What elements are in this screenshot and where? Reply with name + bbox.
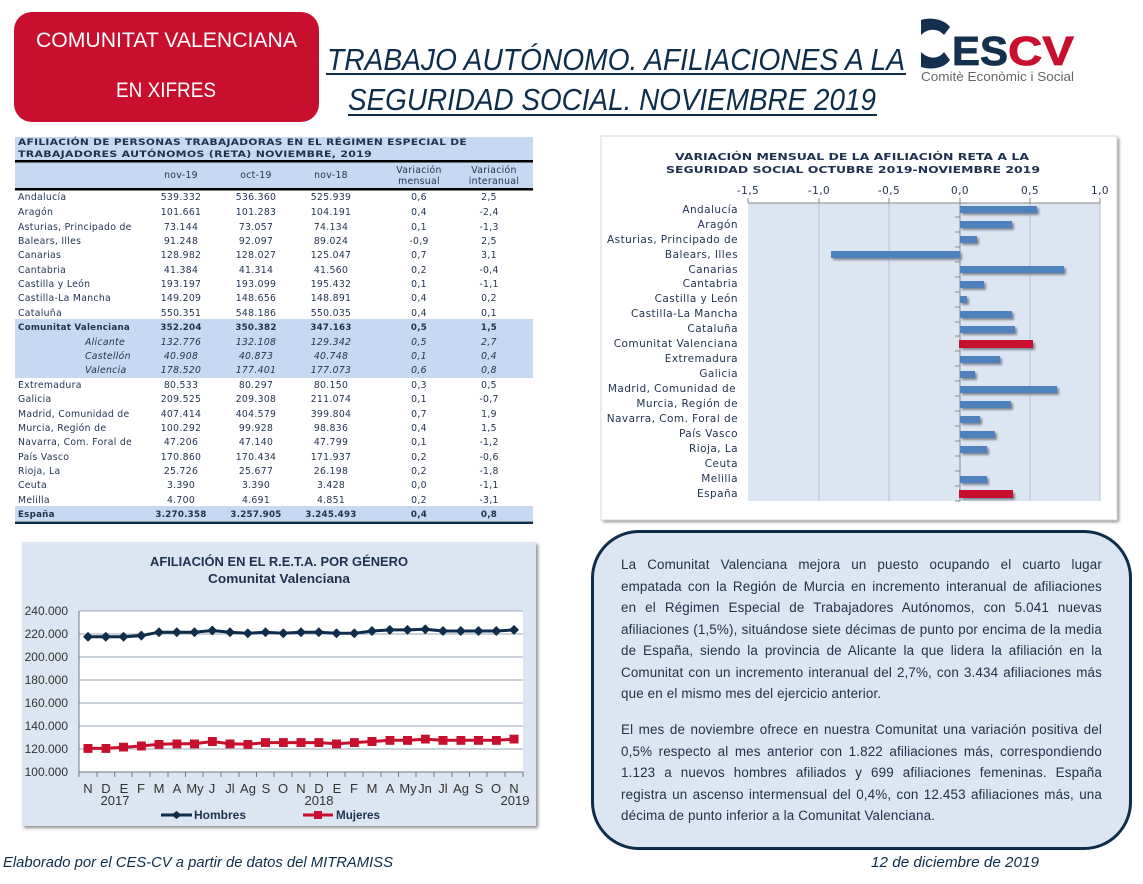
table rows: resto de comunidades: 0,4 [411, 423, 427, 434]
table rows: provincias: 132.776 [161, 337, 201, 348]
table rows: comunidades: 193.099 [236, 279, 276, 290]
text panel: commentary: Comunitat con un incremento interanual del 2,7%, con 3.434 afiliaciones más [621, 665, 1102, 680]
table rows: resto de comunidades: 80.150 [314, 380, 348, 391]
table rows: provincias: Alicante [84, 337, 125, 348]
table rows: comunidades: 0,2 [481, 293, 497, 304]
table rows: resto de comunidades: -3,1 [479, 495, 499, 506]
table rows: comunidades: Cataluña [18, 308, 62, 319]
text panel: commentary: registra un ascenso intermensual del 0,4%, con 12.453 afiliaciones más, una [621, 787, 1102, 802]
table: afiliaciones RETA por comunidad [15, 136, 533, 524]
table rows: comunidades: 536.360 [236, 192, 276, 203]
bar chart category labels: Balears, Illes [665, 249, 738, 261]
x axis labels: D [101, 781, 111, 796]
table title [18, 136, 467, 160]
table rows: comunidades: 128.982 [161, 250, 201, 261]
table rows: comunidades: 101.283 [236, 207, 276, 218]
table rows: resto de comunidades: Galicia [18, 394, 52, 405]
bars: regions [831, 206, 1064, 483]
table rows: comunidades: 539.332 [161, 192, 201, 203]
bar chart title: SEGURIDAD SOCIAL OCTUBRE 2019-NOVIEMBRE 2019 [666, 165, 1040, 176]
table rows: provincias: 177.401 [236, 365, 276, 376]
y axis labels: 160.000 [25, 696, 68, 710]
logo: CES CV: Comitè Econòmic i Social [921, 70, 1074, 84]
table rows: comunidades: 195.432 [311, 279, 351, 290]
table rows: resto de comunidades: 4.700 [167, 495, 195, 506]
table rows: comunidades: 548.186 [236, 308, 276, 319]
table rows: resto de comunidades: 170.434 [236, 452, 276, 463]
table rows: resto de comunidades: 0,7 [411, 409, 427, 420]
table rows: provincias: 0,8 [481, 365, 497, 376]
line: Hombres [88, 629, 514, 637]
bar chart category labels: Rioja, La [689, 443, 738, 455]
title [326, 42, 906, 117]
table rows: comunidades: 2,5 [481, 192, 497, 203]
table rows: comunidades: 128.027 [236, 250, 276, 261]
table rows: comunidades: 0,7 [411, 250, 427, 261]
x axis labels: 2017 [101, 793, 129, 808]
bar chart x axis labels: 0,5 [1021, 185, 1039, 197]
bar chart x axis labels: 1,0 [1091, 185, 1109, 197]
table rows: resto de comunidades: 99.928 [239, 423, 273, 434]
table rows: resto de comunidades: 170.860 [161, 452, 201, 463]
table rows: resto de comunidades [18, 380, 499, 506]
table rows: provincias: 0,1 [411, 351, 427, 362]
bar chart category labels: Canarias [688, 264, 738, 276]
table rows: resto de comunidades: -1,8 [479, 466, 499, 477]
table rows: comunidades: Aragón [18, 207, 53, 218]
table header: mensual [398, 176, 440, 187]
x axis labels: My [186, 781, 204, 796]
text panel: commentary: que en el mismo mes del ejercicio anterior. [621, 686, 881, 701]
bar chart category labels: Castilla y León [655, 293, 738, 305]
table rows: comunidades [18, 192, 499, 319]
text panel: commentary: El mes de noviembre ofrece en nuestra Comunitat una variación positiva del [621, 722, 1102, 737]
table rows: comunidades: 92.097 [239, 236, 273, 247]
table rows: comunidades: 3,1 [481, 250, 497, 261]
table rows: resto de comunidades: 404.579 [236, 409, 276, 420]
table rows: resto de comunidades: 1,5 [481, 423, 497, 434]
text panel: commentary: afiliaciones (1,5%), situándose siete décimas de punto por encima de la media [621, 622, 1102, 637]
x axis labels [83, 781, 529, 808]
table rows: provincias [84, 337, 497, 376]
table rows: comunidades: Asturias, Principado de [18, 222, 132, 233]
table row: España: España [18, 510, 55, 520]
footer: date: 12 de diciembre de 2019 [871, 854, 1040, 871]
table rows: resto de comunidades: 80.297 [239, 380, 273, 391]
text panel: commentary: décima de punto inferior a la Comunitat Valenciana. [621, 808, 935, 823]
bar chart category labels: Extremadura [665, 353, 738, 365]
table row: Comunitat Valenciana [18, 323, 497, 333]
table rows: comunidades: Castilla-La Mancha [18, 293, 111, 304]
text panel: commentary: en el Régimen Especial de Trabajadores Autónomos, con 5.041 nuevas [621, 600, 1102, 615]
table rows: resto de comunidades: 80.533 [164, 380, 198, 391]
table rows: resto de comunidades: 0,0 [411, 480, 427, 491]
table title: TRABAJADORES AUTÓNOMOS (RETA) NOVIEMBRE, 2019 [18, 148, 372, 160]
x axis labels: M [367, 781, 377, 796]
table rows: provincias: 178.520 [161, 365, 201, 376]
table rows: resto de comunidades: Navarra, Com. Foral de [18, 437, 132, 448]
footer: source: Elaborado por el CES-CV a partir de datos del MITRAMISS [3, 854, 393, 871]
table row: España [18, 510, 497, 520]
table rows: provincias: 0,6 [411, 365, 427, 376]
table rows: comunidades: -1,3 [479, 222, 499, 233]
table rows: resto de comunidades: 0,5 [481, 380, 497, 391]
x axis labels: Ag [240, 781, 256, 796]
table header: Variación [396, 165, 442, 176]
table rows: resto de comunidades: 0,2 [411, 466, 427, 477]
bar chart category labels [607, 204, 738, 500]
y axis labels [25, 604, 68, 779]
x axis labels: E [333, 781, 342, 796]
table rows: provincias: 177.073 [311, 365, 351, 376]
table rows: comunidades: Cantabria [18, 265, 66, 276]
logo: CES CV: ES [952, 28, 1008, 74]
table rows: comunidades: 2,5 [481, 236, 497, 247]
table rows: provincias: 40.873 [239, 351, 273, 362]
table rows: resto de comunidades: 0,2 [411, 495, 427, 506]
bar chart x axis labels: -1,0 [808, 185, 830, 197]
bar chart category labels: Andalucía [682, 204, 738, 216]
table rows: resto de comunidades: 0,3 [411, 380, 427, 391]
legend: Hombres: Hombres [194, 808, 246, 822]
x axis labels: 2018 [305, 793, 333, 808]
table row: Comunitat Valenciana: 347.163 [310, 323, 352, 333]
table rows: resto de comunidades: 47.799 [314, 437, 348, 448]
bar chart category labels: Galicia [699, 368, 738, 380]
table rows: resto de comunidades: 25.726 [164, 466, 198, 477]
x axis labels: Jn [418, 781, 432, 796]
table rows: resto de comunidades: Melilla [18, 495, 50, 506]
x axis labels: Ag [453, 781, 469, 796]
bar chart category labels: País Vasco [679, 428, 738, 440]
bar chart title [666, 150, 1040, 176]
table header: interanual [469, 176, 519, 187]
x axis labels: N [83, 781, 93, 796]
bar chart category labels: Cataluña [687, 323, 738, 335]
table rows: comunidades: 0,2 [411, 265, 427, 276]
table rows: comunidades: 148.656 [236, 293, 276, 304]
bar chart x axis labels: 0,0 [951, 185, 969, 197]
y axis labels: 140.000 [25, 719, 68, 733]
table rows: comunidades: 73.144 [164, 222, 198, 233]
table rows: comunidades: -0,4 [479, 265, 499, 276]
bar chart category labels: Comunitat Valenciana [614, 338, 738, 350]
x axis labels: My [399, 781, 417, 796]
table rows: resto de comunidades: -0,6 [479, 452, 499, 463]
title: TRABAJO AUTÓNOMO. AFILIACIONES A LA [327, 42, 905, 77]
bar chart title: VARIACIÓN MENSUAL DE LA AFILIACIÓN RETA A LA [675, 150, 1029, 163]
table rows: resto de comunidades: 25.677 [239, 466, 273, 477]
text panel: commentary: de España, siendo la provincia de Alicante la que lidera la afiliación en la [621, 643, 1102, 658]
table rows: comunidades: 550.035 [311, 308, 351, 319]
panel: variación mensual bar chart [601, 136, 1119, 522]
bar chart category labels: Melilla [701, 473, 738, 485]
table rows: provincias: Castellón [85, 351, 131, 362]
table rows: comunidades: 525.939 [311, 192, 351, 203]
table rows: resto de comunidades: 4.851 [317, 495, 345, 506]
x axis labels: Jl [225, 781, 235, 796]
table rows: provincias: 0,4 [481, 351, 497, 362]
x axis labels: A [386, 781, 395, 796]
table rows: comunidades: 148.891 [311, 293, 351, 304]
table rows: resto de comunidades: País Vasco [18, 452, 69, 463]
legend: Hombres [161, 808, 246, 822]
table row: España: 3.257.905 [230, 510, 282, 520]
table rows: resto de comunidades: 3.390 [167, 480, 195, 491]
table rows: comunidades: 74.134 [314, 222, 348, 233]
bar chart x axis labels: -1,5 [737, 185, 759, 197]
x axis labels: O [278, 781, 288, 796]
x axis labels: A [173, 781, 182, 796]
table rows: comunidades: 0,1 [411, 222, 427, 233]
table rows: resto de comunidades: 47.206 [164, 437, 198, 448]
table rows: resto de comunidades: 407.414 [161, 409, 201, 420]
bar chart category labels: Cantabria [683, 278, 738, 290]
line chart title: AFILIACIÓN EN EL R.E.T.A. POR GÉNERO [150, 554, 408, 569]
text panel: commentary: 1.123 a nuevos hombres afiliados y 699 afiliaciones femeninas. España [621, 765, 1102, 780]
table rows: comunidades: 0,4 [411, 207, 427, 218]
y axis labels: 220.000 [25, 627, 68, 641]
panel: afiliación por género line chart [22, 542, 538, 828]
table row: España: 3.245.493 [305, 510, 357, 520]
table rows: comunidades: 125.047 [311, 250, 351, 261]
table row: España: 0,8 [481, 510, 497, 520]
table rows: comunidades: 149.209 [161, 293, 201, 304]
table row: Comunitat Valenciana: 0,5 [411, 323, 427, 333]
text panel: commentary: 0,5% respecto al mes anterior con 1.822 afiliaciones más, correspondiendo [621, 744, 1102, 759]
table rows: resto de comunidades: 209.308 [236, 394, 276, 405]
table rows: comunidades: Balears, Illes [18, 236, 81, 247]
x axis labels: D [314, 781, 324, 796]
table rows: resto de comunidades: Rioja, La [18, 466, 60, 477]
badge: Comunitat Valenciana en xifres: EN XIFRES [116, 79, 216, 102]
table header: nov-18 [314, 170, 348, 181]
table rows: comunidades: Canarias [18, 250, 61, 261]
table title: AFILIACIÓN DE PERSONAS TRABAJADORAS EN EL RÉGIMEN ESPECIAL DE [18, 136, 467, 148]
x axis labels: 2019 [501, 793, 529, 808]
table rows: comunidades: 0,1 [481, 308, 497, 319]
table rows: resto de comunidades: 98.836 [314, 423, 348, 434]
table rows: resto de comunidades: 171.937 [311, 452, 351, 463]
table rows: comunidades: Castilla y León [18, 279, 90, 290]
legend: Mujeres [303, 808, 380, 822]
title: SEGURIDAD SOCIAL. NOVIEMBRE 2019 [348, 82, 876, 117]
bar chart category labels: Ceuta [705, 458, 738, 470]
x axis labels: J [209, 781, 215, 796]
bar chart category labels: Castilla-La Mancha [631, 308, 738, 320]
table rows: provincias: 129.342 [311, 337, 351, 348]
bar chart plot area [748, 203, 1100, 501]
table rows: resto de comunidades: -0,7 [479, 394, 499, 405]
badge: Comunitat Valenciana en xifres [14, 12, 319, 122]
y axis labels: 120.000 [25, 742, 68, 756]
table rows: comunidades: 0,4 [411, 308, 427, 319]
table rows: resto de comunidades: Madrid, Comunidad de [18, 409, 130, 420]
x axis labels: F [137, 781, 145, 796]
table rows: resto de comunidades: 100.292 [161, 423, 201, 434]
x axis labels: N [509, 781, 519, 796]
y axis labels: 180.000 [25, 673, 68, 687]
y axis labels: 240.000 [25, 604, 68, 618]
table rows: resto de comunidades: 4.691 [242, 495, 270, 506]
table rows: resto de comunidades: -1,2 [479, 437, 499, 448]
table rows: provincias: 40.908 [164, 351, 198, 362]
table rows: resto de comunidades: 211.074 [311, 394, 351, 405]
table rows: comunidades: 41.314 [239, 265, 273, 276]
table rows: resto de comunidades: 47.140 [239, 437, 273, 448]
x axis labels: S [262, 781, 271, 796]
line: Mujeres [88, 739, 514, 748]
table rows: resto de comunidades: 399.804 [311, 409, 351, 420]
table rows: provincias: 0,5 [411, 337, 427, 348]
line chart title [150, 554, 408, 586]
bar chart category labels: Navarra, Com. Foral de [607, 413, 738, 425]
y axis labels: 100.000 [25, 765, 68, 779]
bar chart category labels: España [697, 488, 738, 500]
table rows: comunidades: 0,1 [411, 279, 427, 290]
table rows: resto de comunidades: 0,1 [411, 437, 427, 448]
logo: CES CV [921, 19, 1075, 84]
table rows: comunidades: Andalucía [18, 192, 66, 203]
bar chart category labels: Aragón [698, 219, 738, 231]
x axis labels: O [491, 781, 501, 796]
logo: CES CV: CV [1008, 28, 1075, 74]
table rows: resto de comunidades: 26.198 [314, 466, 348, 477]
x axis labels: Jl [438, 781, 448, 796]
x axis labels: N [296, 781, 306, 796]
table header [164, 165, 519, 187]
table rows: comunidades: 101.661 [161, 207, 201, 218]
table rows: resto de comunidades: 0,2 [411, 452, 427, 463]
table rows: comunidades: 73.057 [239, 222, 273, 233]
table rows: comunidades: 0,6 [411, 192, 427, 203]
table row: Comunitat Valenciana: Comunitat Valenciana [18, 323, 130, 333]
x axis labels: E [120, 781, 129, 796]
table rows: comunidades: -2,4 [479, 207, 499, 218]
table rows: comunidades: 104.191 [311, 207, 351, 218]
table rows: provincias: 132.108 [236, 337, 276, 348]
bar shadows [833, 208, 1066, 500]
bar chart x axis labels: -0,5 [878, 185, 900, 197]
table rows: resto de comunidades: Extremadura [18, 380, 82, 391]
table rows: resto de comunidades: 0,1 [411, 394, 427, 405]
table rows: comunidades: 41.560 [314, 265, 348, 276]
table rows: comunidades: 550.351 [161, 308, 201, 319]
table header: Variación [471, 165, 517, 176]
table rows: resto de comunidades: Murcia, Región de [18, 423, 106, 434]
table rows: comunidades: -0,9 [409, 236, 429, 247]
table rows: comunidades: 41.384 [164, 265, 198, 276]
table rows: resto de comunidades: 3.390 [242, 480, 270, 491]
table row: España: 0,4 [411, 510, 427, 520]
legend: Mujeres: Mujeres [336, 808, 380, 822]
text panel: commentary: La Comunitat Valenciana mejora un puesto ocupando el cuarto lugar [621, 557, 1102, 572]
table rows: resto de comunidades: -1,1 [479, 480, 499, 491]
table header: nov-19 [164, 170, 198, 181]
bar chart category labels: Murcia, Región de [636, 398, 738, 410]
table row: Comunitat Valenciana: 350.382 [235, 323, 277, 333]
table row: España: 3.270.358 [155, 510, 207, 520]
x axis labels: F [350, 781, 358, 796]
table rows: resto de comunidades: Ceuta [18, 480, 47, 491]
bar chart category labels: Asturias, Principado de [607, 234, 738, 246]
badge: Comunitat Valenciana en xifres: COMUNITAT VALENCIANA [36, 29, 297, 52]
table rows: comunidades: 193.197 [161, 279, 201, 290]
line chart title: Comunitat Valenciana [208, 571, 351, 586]
table rows: resto de comunidades: 3.428 [317, 480, 345, 491]
line chart plot area [79, 611, 523, 772]
table rows: comunidades: 0,4 [411, 293, 427, 304]
table rows: resto de comunidades: 209.525 [161, 394, 201, 405]
y axis labels: 200.000 [25, 650, 68, 664]
table rows: provincias: 2,7 [481, 337, 497, 348]
bars: Comunitat Valenciana and España highlighted [959, 340, 1033, 498]
bar chart x axis labels [737, 185, 1109, 197]
table rows: provincias: 40.748 [314, 351, 348, 362]
text panel: commentary [591, 530, 1132, 850]
table rows: comunidades: 89.024 [314, 236, 348, 247]
text panel: commentary: empatada con la Región de Murcia en incremento interanual de afiliaciones [621, 579, 1102, 594]
table rows: comunidades: 91.248 [164, 236, 198, 247]
table rows: provincias: Valencia [85, 365, 126, 376]
table row: Comunitat Valenciana: 352.204 [160, 323, 202, 333]
table rows: resto de comunidades: 1,9 [481, 409, 497, 420]
x axis labels: S [475, 781, 484, 796]
table rows: comunidades: -1,1 [479, 279, 499, 290]
table row: Comunitat Valenciana: 1,5 [481, 323, 497, 333]
bar chart category labels: Madrid, Comunidad de [608, 383, 736, 395]
x axis labels: M [154, 781, 164, 796]
table header: oct-19 [240, 170, 272, 181]
